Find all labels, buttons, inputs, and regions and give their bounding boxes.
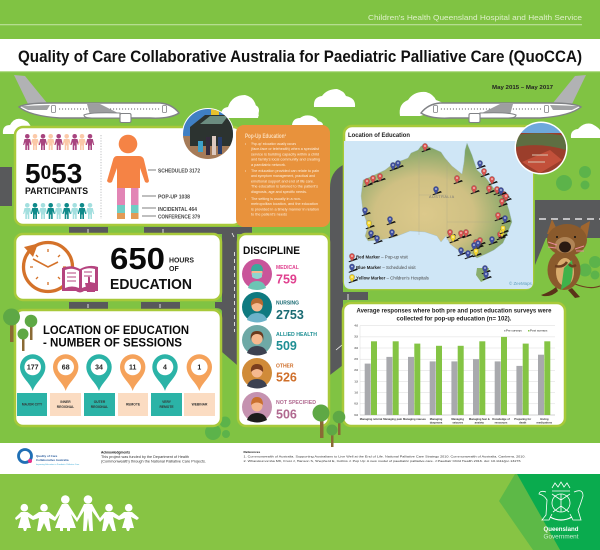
medical <box>242 259 299 290</box>
category labels: Managing <box>430 417 443 421</box>
panel: pop-up education <box>236 125 330 227</box>
bottom banner <box>0 474 600 550</box>
panel: survey chart <box>343 303 565 426</box>
pop-up text: service is building capacity within a child <box>251 152 319 156</box>
map heading: Location of Education <box>348 132 410 139</box>
medical: 759 <box>276 272 297 286</box>
organisation name: Children's Health Queensland Hospital and Health Service <box>368 13 582 22</box>
sessions heading: LOCATION OF EDUCATION <box>43 323 189 337</box>
pins: session counts: 4 <box>163 364 167 372</box>
category labels: seizures <box>452 420 464 424</box>
panel: location sessions <box>15 310 221 426</box>
Queensland Government wordmark <box>544 526 579 540</box>
roads <box>0 165 600 375</box>
category boxes: MAJOR CITY <box>22 402 43 406</box>
breakdown labels: INCIDENTAL 464 <box>158 207 198 213</box>
acknowledgements: This project was funded by the Department of Health <box>101 455 189 459</box>
allied health: ALLIED HEALTH <box>276 332 317 338</box>
chart legend: Pre surveys <box>506 329 522 333</box>
pop-up text: The education provided can relate to pain <box>251 169 319 173</box>
of label: OF <box>169 266 179 273</box>
chart legend: Post surveys <box>530 329 548 333</box>
participants label: PARTICIPANTS <box>25 186 88 196</box>
category boxes: INNER <box>60 400 71 404</box>
acknowledgements <box>101 450 206 464</box>
markers <box>362 143 512 280</box>
references: 1. Commonwealth of Australia. Supporting Australians to Live Well at the End of Life. National Palliative Care Strategy 2010. Commonwealth of Australia, Canberra, 2010. <box>244 454 526 458</box>
pins: session counts <box>20 354 212 391</box>
plane left <box>14 75 179 122</box>
bar chart: 3.5 <box>354 335 359 339</box>
clouds <box>3 89 600 138</box>
participants count: 5 <box>25 158 41 189</box>
category boxes: REGIONAL <box>57 405 74 409</box>
pins: session counts: 1 <box>197 364 201 372</box>
discipline heading: DISCIPLINE <box>243 245 300 257</box>
icon: book <box>62 266 98 292</box>
big person breakdown <box>107 135 149 219</box>
logo: QuoCCA: Quality of Care <box>36 454 58 458</box>
icon: clock <box>24 242 72 292</box>
pop-up text: and symptom management, practical and <box>251 174 315 178</box>
photo: education venue <box>182 108 234 160</box>
breakdown labels: SCHEDULED 3172 <box>158 168 200 174</box>
category boxes: REMOTE <box>126 402 141 406</box>
acknowledgements: (Commonwealth) through the National Palliative Care Projects. <box>101 460 206 464</box>
map credit: © ZeeMaps <box>509 281 533 286</box>
references: 2. Wharekumomba MK, Frost J, Hanson S, Shepherd E, Collins J. Pop Up: A new model of paediatric palliative care. J Paediatr Child Health 2016. doi: 10.1111/jpc.13276 <box>244 459 521 463</box>
icon: family paper chain <box>15 495 139 531</box>
bar chart: 1.0 <box>354 390 359 394</box>
category labels: Managing referral <box>360 417 383 421</box>
pop-up text: The education is tailored to the patient's <box>251 185 318 189</box>
pop-up text: The setting is usually in a non- <box>251 197 301 201</box>
map legend: Red Marker – Pop-up visit <box>356 254 409 260</box>
sessions heading <box>43 323 189 350</box>
bar chart <box>354 324 555 424</box>
category labels: Managing nausea <box>403 417 426 421</box>
category labels: Giving <box>540 417 549 421</box>
pop-up text: emotional support and end of life care. <box>251 179 314 183</box>
map legend: Yellow Marker – Children's Hospitals <box>356 276 430 280</box>
acknowledgements: Acknowledgments <box>101 450 130 454</box>
map of Australia: AUSTRALIA <box>429 195 455 199</box>
hours count: 650 <box>110 241 165 276</box>
pop-up text: • <box>245 197 247 201</box>
category boxes: OUTER <box>94 400 106 404</box>
category boxes: REGIONAL <box>91 405 108 409</box>
bar chart: 0.0 <box>354 413 359 417</box>
other: 526 <box>276 371 297 385</box>
category boxes <box>17 393 215 416</box>
other <box>242 358 297 388</box>
bar chart: 2.5 <box>354 357 359 361</box>
panel: location map <box>344 126 533 289</box>
category boxes: VERY <box>162 400 172 404</box>
logo: QuoCCA: Improving Education in Paediatric Palliative Care <box>36 463 80 466</box>
category labels: Preparing for <box>514 417 531 421</box>
pop-up text: and family's local community and creating <box>251 158 320 162</box>
category labels: Managing pain <box>383 417 402 421</box>
photo: red earth aerial <box>514 122 568 174</box>
category labels: dyspnoea <box>430 420 443 424</box>
nursing: 2753 <box>276 308 304 322</box>
hours label: HOURS <box>169 258 194 264</box>
category labels: Managing fear & <box>469 417 490 421</box>
allied health: 509 <box>276 339 297 353</box>
category labels: anxiety <box>475 420 484 424</box>
pop-up text <box>245 142 320 217</box>
pop-up heading: Pop-Up Education¹ <box>245 133 286 140</box>
bar chart: 2.0 <box>354 368 359 372</box>
pins: session counts: 177 <box>27 364 39 372</box>
title band <box>0 39 600 72</box>
category boxes: REMOTE <box>159 405 174 409</box>
date range: May 2015 – May 2017 <box>492 85 553 91</box>
pop-up text: to the patient's needs <box>251 213 287 217</box>
breakdown labels: POP-UP 1038 <box>158 194 190 200</box>
participants count: 53 <box>51 158 82 189</box>
panel: hours of education <box>15 234 221 300</box>
map legend: Blue Marker – Scheduled visit <box>356 265 416 270</box>
footer band <box>0 443 600 474</box>
road markings <box>88 219 600 350</box>
bar chart: 1.5 <box>354 379 359 383</box>
not specified: NOT SPECIFIED <box>276 400 316 406</box>
bar chart: 0.5 <box>354 402 359 406</box>
panel: participants <box>15 127 241 225</box>
other: OTHER <box>276 364 294 370</box>
category labels: Knowledge of <box>492 417 510 421</box>
allied health <box>242 325 317 356</box>
education label: EDUCATION <box>110 276 192 293</box>
category labels: death <box>519 420 527 424</box>
chart title <box>356 308 552 322</box>
chart title: collected for pop-up education (n= 102). <box>396 316 512 322</box>
Queensland Government wordmark: Government <box>544 534 579 540</box>
not specified <box>242 392 316 422</box>
people row: teal <box>23 203 94 219</box>
references <box>244 450 526 463</box>
map of Australia <box>344 141 533 289</box>
breakdown labels <box>158 168 200 220</box>
pins: session counts: 34 <box>95 364 103 372</box>
pop-up text: a paediatric network. <box>251 163 286 167</box>
participants count: 0 <box>41 163 51 184</box>
Queensland Government wordmark: Queensland <box>544 526 578 533</box>
not specified: 506 <box>276 407 297 421</box>
people row: purple and peach <box>23 134 94 150</box>
chart title: Average responses where both pre and post education surveys were <box>356 308 552 314</box>
pop-up text: • <box>245 142 247 146</box>
nursing <box>242 292 304 322</box>
pop-up text: • <box>245 169 247 173</box>
pins: session counts: 68 <box>62 364 70 372</box>
pins: session counts: 11 <box>129 364 137 372</box>
category labels: Managing <box>451 417 464 421</box>
nursing: NURSING <box>276 300 299 306</box>
logo: QuoCCA: Collaborative Australia <box>36 458 69 462</box>
pop-up text: (face-face or telehealth) when a specialist <box>251 147 319 151</box>
pop-up text: is provided in a timely manner in relation <box>251 207 319 211</box>
category labels <box>360 417 553 424</box>
chart legend <box>504 329 548 333</box>
logo: QuoCCA <box>18 450 80 466</box>
panel: discipline <box>238 234 329 426</box>
pop-up text: metropolitan location, and the education <box>251 202 318 206</box>
sessions heading: - NUMBER OF SESSIONS <box>43 336 182 350</box>
pop-up text: 'Pop-up' education usually occurs <box>251 142 296 146</box>
tree trunks and canopies right of discipline <box>312 404 345 447</box>
logo: Queensland Government crest <box>539 482 583 520</box>
medical: MEDICAL <box>276 265 299 271</box>
category boxes: WEBINAR <box>192 402 208 406</box>
category labels: medications <box>536 420 553 424</box>
header rule <box>0 24 582 25</box>
pop-up text: diagnosis, age and specific needs. <box>251 190 307 194</box>
category labels: resources <box>495 420 508 424</box>
references: References <box>244 450 260 454</box>
bar chart: 4.0 <box>354 324 359 328</box>
illustration: quokka <box>541 219 600 298</box>
plane right <box>421 75 586 122</box>
bar chart: 3.0 <box>354 346 359 350</box>
bushes <box>205 166 600 440</box>
breakdown labels: CONFERENCE 379 <box>158 214 200 220</box>
map legend <box>348 253 430 283</box>
trees left <box>3 308 37 351</box>
